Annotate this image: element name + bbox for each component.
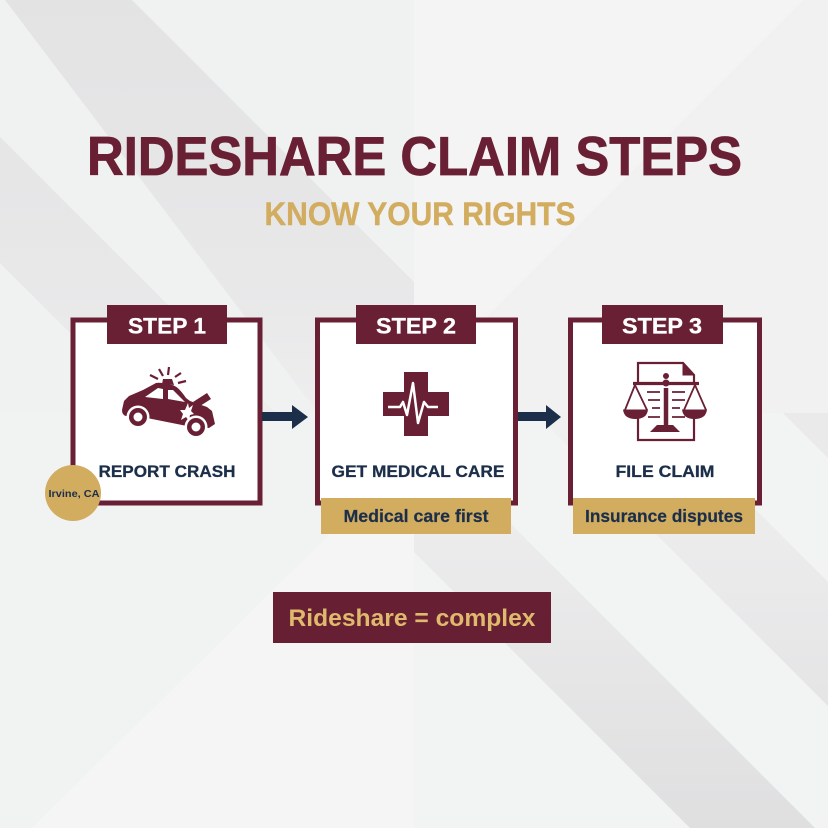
panel: step 2	[318, 305, 516, 534]
icon: medical cross	[383, 372, 449, 436]
step 2 tab	[356, 305, 476, 344]
label: file claim: FILE CLAIM	[616, 462, 714, 481]
step 3 tab	[602, 305, 723, 344]
arrow 2	[518, 405, 561, 429]
location badge: Irvine, CA	[48, 488, 100, 500]
step 1 tab	[107, 305, 227, 344]
panel: step 1	[73, 305, 260, 503]
step 2 tab: STEP 2	[376, 314, 456, 338]
icon: document and scales	[623, 363, 707, 440]
gold note: insurance disputes	[573, 498, 755, 534]
icon: crashed car	[122, 367, 215, 438]
label: report crash: REPORT CRASH	[98, 462, 236, 481]
step 3 tab: STEP 3	[622, 314, 702, 338]
label: get medical care: GET MEDICAL CARE	[332, 462, 504, 481]
banner: rideshare = complex: Rideshare = complex	[288, 605, 536, 632]
title: RIDESHARE CLAIM STEPS	[87, 125, 742, 187]
gold note: medical care first	[321, 498, 511, 534]
arrow 1	[262, 405, 308, 429]
subtitle: KNOW YOUR RIGHTS	[264, 196, 576, 232]
panel: step 3	[570, 305, 760, 534]
location badge	[45, 465, 101, 521]
step 1 tab: STEP 1	[128, 314, 206, 338]
gold note: medical care first: Medical care first	[344, 506, 489, 526]
banner: rideshare = complex	[273, 592, 551, 643]
gold note: insurance disputes: Insurance disputes	[585, 506, 743, 526]
